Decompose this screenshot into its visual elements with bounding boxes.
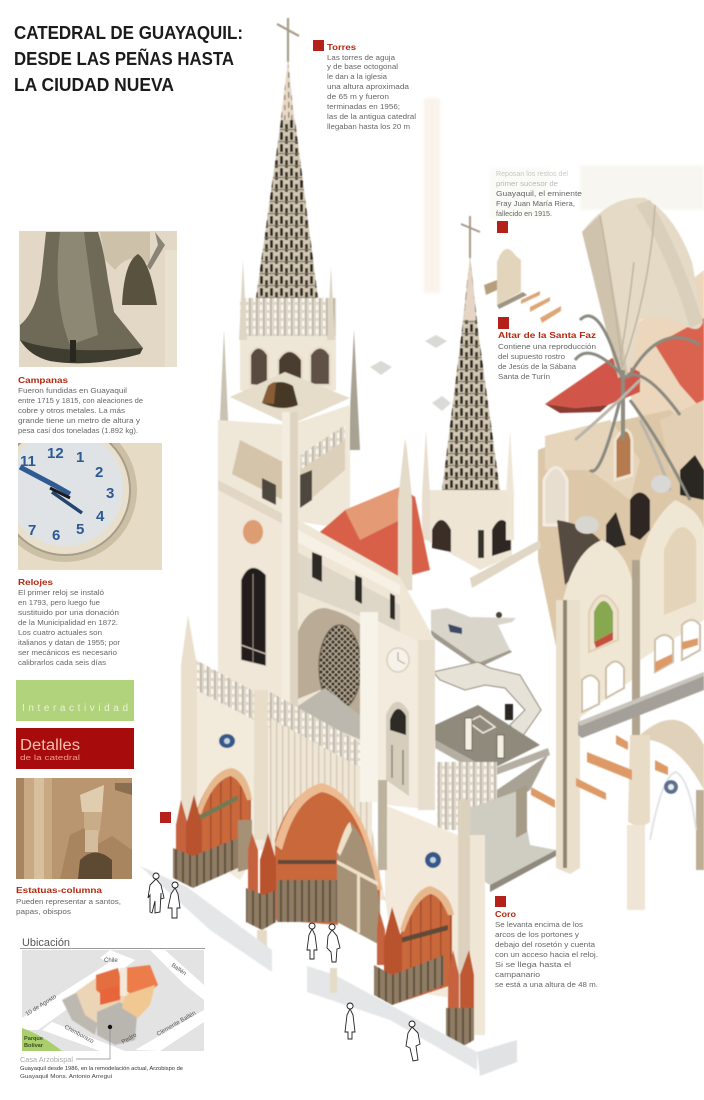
lower bays — [563, 540, 632, 730]
slim columns — [556, 600, 580, 874]
title — [14, 22, 243, 95]
callout: Coro: Coro — [495, 909, 516, 919]
street labels: Clemente Ballén — [156, 1011, 197, 1038]
callout: Coro: campanario — [495, 970, 540, 979]
callout: restos del obispo: Fray Juan María Riera, — [496, 199, 575, 208]
text block: Estatuas-columna — [16, 885, 121, 916]
text block: Relojes: Relojes — [18, 577, 53, 587]
illustration: lower exploded floors — [431, 608, 556, 892]
cross — [461, 216, 480, 258]
panel: statue photo — [16, 778, 132, 879]
callout: Coro: con un acceso hacia el reloj. — [495, 950, 598, 959]
map base — [22, 950, 204, 1051]
text block: Relojes: de la Municipalidad en 1872. — [18, 618, 118, 627]
faint background ghost architecture — [424, 98, 704, 293]
dark void — [557, 520, 604, 585]
text block: Campanas: Fueron fundidas en Guayaquil — [18, 386, 127, 395]
callout: restos del obispo: Guayaquil, el eminente — [496, 189, 582, 198]
callout: Altar de la Santa Faz: Santa de Turín — [498, 372, 550, 381]
text block: Relojes: en 1793, pero luego fue — [18, 598, 100, 607]
text block: Campanas: entre 1715 y 1815, con aleaciones de — [18, 396, 143, 405]
illustration: interior nave (right) — [531, 270, 704, 910]
small arched windows — [582, 675, 599, 712]
people figures — [148, 873, 420, 1061]
center fluted wall — [270, 706, 385, 900]
street labels: Ballén — [170, 963, 187, 977]
red banner: Detalles: de la catedral — [20, 755, 81, 762]
red banner: Detalles — [16, 728, 134, 769]
red banner: Detalles: Detalles — [20, 737, 80, 754]
text block: Relojes: italianos y datan de 1955; por — [18, 638, 121, 647]
right pinnacle group — [398, 438, 412, 590]
couple on floor — [465, 718, 504, 758]
icon: altar marker — [497, 221, 508, 233]
location map: Bolívar — [24, 1043, 44, 1049]
panel: clock photo: 4 — [96, 508, 105, 525]
belfry — [240, 298, 336, 405]
callout: Altar de la Santa Faz: Contiene una reproducción — [498, 342, 596, 351]
red roof — [545, 318, 704, 413]
tower corner buttress — [282, 412, 298, 852]
lower slab — [465, 790, 556, 885]
lower arch and column — [640, 720, 704, 790]
green banner: Interactividad — [22, 703, 128, 714]
bell — [262, 382, 298, 408]
panel: clock photo: 3 — [106, 485, 114, 502]
upper spire — [280, 60, 295, 125]
text block: Relojes: sustituido por una donación — [18, 608, 119, 617]
panel: clock photo: 12 — [47, 445, 64, 462]
callout: Coro: Si se llega hasta el — [495, 960, 571, 969]
callout: Coro: Se levanta encima de los — [495, 920, 583, 929]
portal right — [392, 888, 452, 1005]
illustration: small altar with pews — [484, 249, 561, 323]
right front tower — [360, 612, 435, 810]
callout: Torres: Torres — [327, 42, 356, 52]
text block: Estatuas-columna: Pueden representar a santos, — [16, 897, 121, 906]
pinnacles — [239, 260, 247, 340]
far right pinnacle — [448, 950, 459, 1010]
upper bay walls — [538, 410, 704, 680]
callout: Torres: llegaban hasta los 20 m — [327, 122, 410, 131]
panel: clock photo: 1 — [76, 449, 84, 466]
platform — [230, 372, 350, 425]
text block: Relojes: calibrarlos cada seis días — [18, 658, 106, 667]
street labels: Pedro — [121, 1032, 138, 1046]
rear arcade outline — [650, 772, 696, 840]
callout: restos del obispo: primer sucesor de — [496, 179, 558, 188]
nave wall with windows — [293, 517, 435, 800]
illustration: pavement strips — [140, 866, 517, 1076]
callout: Coro — [495, 896, 598, 989]
street labels: Chile — [104, 958, 118, 964]
callout: restos del obispo — [496, 169, 582, 233]
illustration: main facade — [173, 405, 485, 1048]
text block: Relojes — [18, 577, 121, 667]
location map: Guayaquil desde 1986, en la remodelación actual, Arzobispo de — [20, 1066, 183, 1072]
callout: Torres: Las torres de aguja — [327, 53, 395, 62]
right portal pinnacles and base — [377, 910, 385, 965]
callout: Torres: y de base octogonal — [327, 62, 398, 71]
panel: clock photo: 5 — [76, 521, 84, 538]
green banner — [16, 680, 134, 721]
text block: Campanas: Campanas — [18, 375, 68, 385]
location map — [20, 937, 205, 1080]
icon: Torres marker — [313, 40, 324, 51]
heading: Ubicación — [22, 937, 70, 949]
left low wall — [196, 668, 270, 880]
panel: clock photo: 11 — [20, 453, 36, 470]
text block: Relojes: El primer reloj se instaló — [18, 588, 104, 597]
dark slab — [435, 705, 540, 770]
title: DESDE LAS PEÑAS HASTA — [14, 48, 234, 69]
floating stone blocks — [370, 335, 671, 534]
location map: CENTRO DE GUAYAQUIL — [23, 952, 87, 958]
callout: Coro: debajo del rosetón y cuenta — [495, 940, 595, 949]
top slab — [431, 608, 516, 663]
text block: Estatuas-columna: Estatuas-columna — [16, 885, 102, 895]
panel: clock photo: 7 — [28, 522, 36, 539]
callout: Torres: le dan a la iglesia — [327, 72, 387, 81]
right low wall — [385, 805, 465, 1000]
panel: clock photo: 2 — [95, 464, 103, 481]
text block: Campanas: grande tiene un metro de altura y — [18, 416, 140, 425]
callout: Torres: terminadas en 1956; — [327, 102, 400, 111]
gallery level of tower — [218, 405, 350, 530]
left buttress — [181, 615, 197, 830]
street labels: Chimborazo — [63, 1024, 95, 1045]
stained glass — [589, 595, 618, 652]
location map: Casa Arzobispal — [20, 1055, 73, 1064]
location map: Parque — [24, 1036, 43, 1042]
stair block — [437, 762, 497, 830]
panel: bell photo — [19, 231, 177, 367]
icon: Coro marker — [495, 896, 506, 907]
left portal pinnacles and base — [176, 800, 188, 855]
illustration: main spire — [219, 18, 360, 450]
text block: Campanas: pesa casi dos toneladas (1.892 kg). — [18, 426, 138, 435]
text block: Campanas: cobre y otros metales. La más — [18, 406, 125, 415]
illustration: rear spire and belfry — [400, 216, 541, 590]
portal center — [275, 785, 380, 925]
icon: statue marker — [160, 812, 171, 823]
illustration: fan vault — [575, 198, 703, 500]
callout: Altar de la Santa Faz: del supuesto rostro — [498, 352, 565, 361]
callout: Altar de la Santa Faz: Altar de la Santa Faz — [498, 330, 596, 340]
location map: Guayaquil Mons. Antonio Arregui — [20, 1074, 112, 1080]
lattice spire — [256, 120, 318, 298]
callout: Coro: se está a una altura de 48 m. — [495, 980, 598, 989]
callout: Altar de la Santa Faz: de Jesús de la Sábana — [498, 362, 576, 371]
pointer — [108, 1025, 112, 1029]
green park — [22, 1028, 62, 1051]
windows of the upper bays — [544, 468, 567, 525]
callout: restos del obispo: fallecido en 1915. — [496, 209, 552, 218]
title: LA CIUDAD NUEVA — [14, 74, 174, 95]
icon: Santa Faz marker — [498, 317, 509, 329]
title: CATEDRAL DE GUAYAQUIL: — [14, 22, 243, 43]
callout: Torres — [313, 40, 416, 131]
mini cathedral — [62, 965, 158, 1045]
panel: clock photo: 6 — [52, 527, 60, 544]
street labels: 10 de Agosto — [25, 994, 58, 1018]
callout: Altar de la Santa Faz — [498, 317, 596, 381]
text block: Relojes: ser mecánicos es necesario — [18, 648, 117, 657]
text block: Campanas — [18, 375, 143, 435]
portal left — [197, 770, 251, 868]
callout: Torres: las de la antigua catedral — [327, 112, 416, 121]
rose window bay — [295, 608, 361, 720]
cross — [277, 18, 299, 62]
text block: Relojes: Los cuatro actuales son — [18, 628, 102, 637]
callout: Coro: arcos de los portones y — [495, 930, 579, 939]
panel: clock photo — [18, 443, 162, 570]
pews — [531, 735, 668, 808]
center-left pinnacles — [248, 833, 258, 895]
left face of tower — [218, 480, 285, 850]
text block: Estatuas-columna: papas, obispos — [16, 907, 71, 916]
peach upper wall behind vault — [610, 270, 704, 440]
callout: restos del obispo: Reposan los restos del — [496, 169, 568, 178]
nave red roof — [320, 487, 430, 578]
blue-grey beam — [578, 672, 704, 738]
street labels — [25, 958, 197, 1046]
callout: Torres: de 65 m y fueron — [327, 92, 389, 101]
ramp outline — [433, 662, 541, 740]
callout: Torres: una altura aproximada — [327, 82, 409, 91]
